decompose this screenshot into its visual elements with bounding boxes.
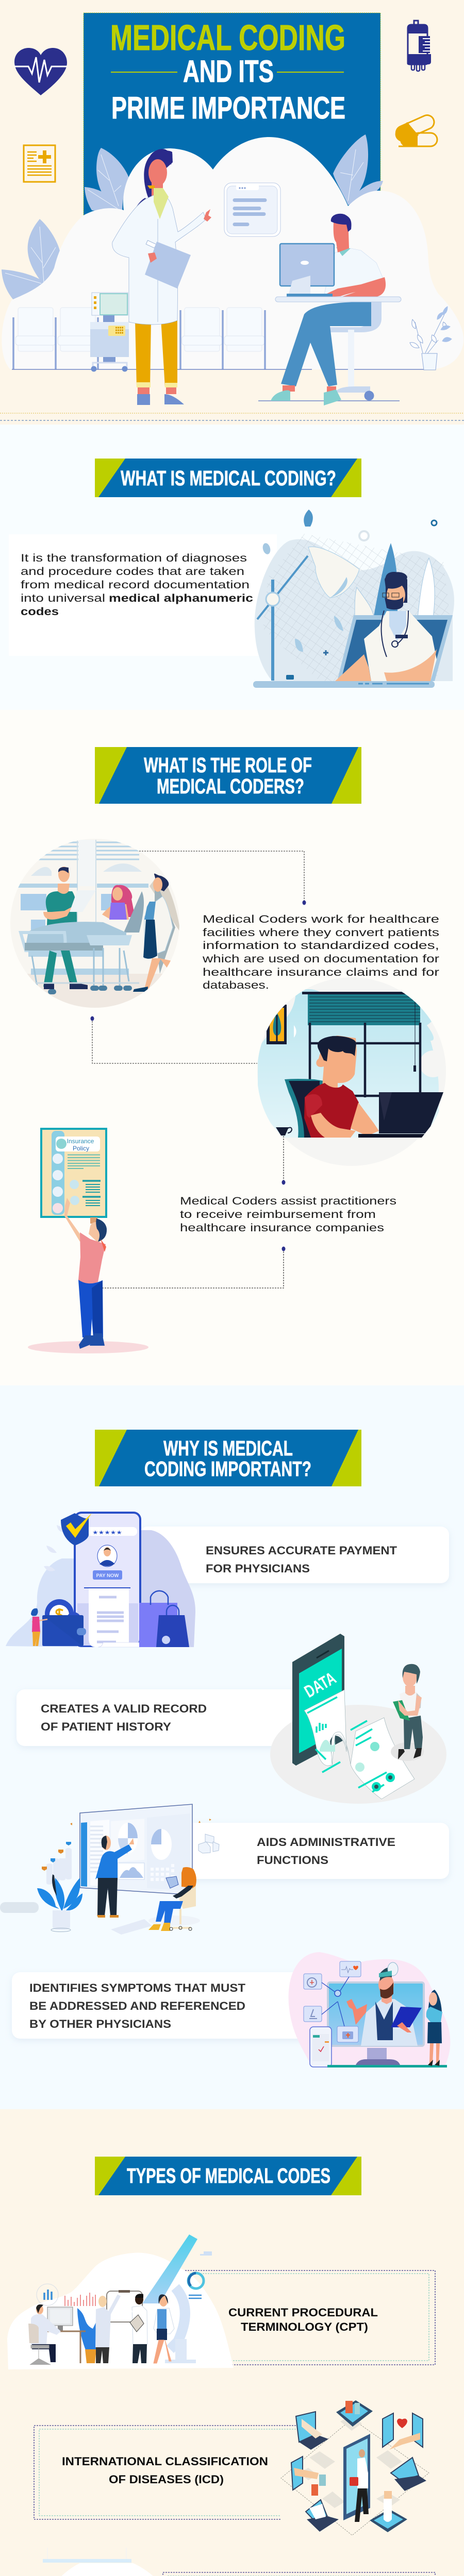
illustration: phone payment: ★★★★★: [92, 1530, 122, 1536]
text block: coders role: information to standardized codes,: [203, 940, 439, 952]
card: valid record: [16, 1689, 305, 1746]
card: administrative functions: FUNCTIONS: [257, 1854, 328, 1867]
background: role of medical coders section: [0, 710, 464, 1385]
card: valid record: CREATES A VALID RECORD: [41, 1702, 207, 1715]
box: CPT: CURRENT PROCEDURAL: [228, 2306, 378, 2319]
text block: coders role: Medical Coders work for healthcare: [203, 913, 439, 925]
connector: coder to text: [281, 1136, 286, 1185]
background: hero section: [0, 0, 464, 425]
card: identifies symptoms: IDENTIFIES SYMPTOMS THAT MUST: [29, 1981, 246, 1994]
text block: definition: into universal: [21, 592, 105, 604]
text block: definition: and procedure codes that are taken: [21, 566, 244, 578]
background: why important section: [0, 1385, 464, 2109]
section: role of medical coders: [10, 747, 446, 1353]
heading: why important: [95, 1430, 361, 1486]
doctor woman: [112, 149, 211, 405]
leaves behind cloud: [2, 134, 383, 300]
connector: ward down to coder: [91, 1016, 257, 1063]
box: CPT: TERMINOLOGY (CPT): [241, 2320, 368, 2333]
illustration: HCPC lab board: [0, 2548, 207, 2576]
card: identifies symptoms: BY OTHER PHYSICIANS: [29, 2018, 171, 2030]
text block: definition: medical alphanumeric: [109, 592, 253, 604]
section: types of medical codes: [0, 2157, 460, 2576]
text block: definition: [21, 552, 253, 618]
icon: heart with ECG: [14, 48, 67, 95]
decorative dotted separators: [0, 413, 464, 414]
heading: what is medical coding: [95, 459, 361, 497]
illustration: person holding insurance policy: Insurance: [67, 1138, 94, 1145]
text block: coders role: which are used on documentation for: [202, 953, 439, 965]
card: accurate payment: ENSURES ACCURATE PAYMENT: [206, 1544, 397, 1557]
background: what is medical coding section: [0, 425, 464, 710]
text block: coders role: facilities where they convert patients: [203, 927, 439, 939]
heading: role of medical coders: WHAT IS THE ROLE OF: [144, 753, 312, 777]
section: what is medical coding: [9, 459, 454, 688]
white text panel: [9, 534, 277, 656]
title divider lines: [111, 72, 344, 73]
text block: reimbursement: Medical Coders assist practitioners: [180, 1195, 396, 1207]
title: and its: AND ITS: [183, 54, 274, 89]
heading: why important: WHY IS MEDICAL: [163, 1436, 293, 1460]
background: types of codes section: [0, 2109, 464, 2576]
waiting chairs left: [13, 308, 98, 369]
card: accurate payment: FOR PHYSICIANS: [206, 1562, 310, 1575]
icon: pills: [394, 113, 437, 147]
box: ICD: [34, 2426, 296, 2519]
card: valid record: OF PATIENT HISTORY: [41, 1720, 171, 1733]
heading: types of medical codes: [95, 2157, 361, 2195]
floor line: [12, 369, 429, 401]
box: ICD: OF DISEASES (ICD): [109, 2473, 224, 2486]
title: prime importance: PRIME IMPORTANCE: [111, 91, 345, 125]
heading: role of medical coders: [95, 747, 361, 804]
potted plant: [410, 307, 452, 370]
heading: why important: CODING IMPORTANT?: [144, 1457, 311, 1481]
card: administrative functions: [170, 1823, 449, 1879]
cloud background: [2, 137, 463, 369]
man at desk: [271, 214, 401, 405]
illustration: doctor on laptop: [253, 510, 454, 688]
illustration: data record: [270, 1634, 446, 1804]
illustration: phone payment: PAY NOW: [96, 1573, 119, 1579]
illustration: coder at laptop circle: [257, 977, 446, 1166]
illustration: telemedicine doctor: [289, 1952, 450, 2067]
illustration: person holding insurance policy: Policy: [73, 1145, 89, 1152]
text block: definition: It is the transformation of diagnoses: [21, 552, 247, 564]
icon: medical document: [24, 145, 55, 182]
illustration: ICD digital health: [281, 2400, 429, 2535]
box: CPT: [175, 2270, 435, 2365]
text block: reimbursement: to receive reimbursement from: [180, 1209, 376, 1221]
card: identifies symptoms: [12, 1972, 311, 2039]
box: HCPC: [163, 2572, 435, 2576]
box: ICD: INTERNATIONAL CLASSIFICATION: [62, 2455, 268, 2468]
heading: what is medical coding: WHAT IS MEDICAL CODING?: [121, 466, 336, 490]
illustration: person holding insurance policy: [28, 1129, 148, 1353]
card: administrative functions: AIDS ADMINISTRATIVE: [257, 1836, 395, 1849]
heading: types of medical codes: TYPES OF MEDICAL CODES: [127, 2164, 330, 2188]
text block: reimbursement: healthcare insurance companies: [180, 1222, 384, 1234]
illustration: phone payment: [6, 1513, 195, 1647]
connector: ward to text: [139, 851, 306, 905]
text block: definition: codes: [21, 606, 59, 618]
connector: text to person: [103, 1247, 286, 1288]
waiting chairs right: [180, 308, 265, 369]
hero illustration and title: [0, 13, 464, 420]
section: why is medical coding important: [0, 1430, 450, 2067]
tablet card: [224, 183, 280, 236]
illustration: CPT lab team: [7, 2234, 234, 2369]
card: identifies symptoms: BE ADDRESSED AND REFERENCED: [29, 1999, 245, 2012]
text block: coders role: databases.: [203, 979, 269, 991]
text block: coders role: healthcare insurance claims and for: [203, 967, 439, 978]
text block: reimbursement: [180, 1195, 396, 1234]
illustration: dashboard team: [0, 1804, 219, 1935]
title: medical coding: MEDICAL CODING: [110, 18, 345, 58]
text block: definition: from medical record documentation: [21, 579, 250, 591]
text block: coders role: [202, 913, 439, 991]
illustration: data record: DATA: [301, 1668, 339, 1702]
illustration: hospital ward circle: [10, 839, 180, 1010]
title panel: [84, 13, 380, 219]
heading: role of medical coders: MEDICAL CODERS?: [157, 774, 304, 798]
medical monitor cart: [90, 293, 129, 372]
icon: IV bag: [407, 21, 431, 71]
card: accurate payment: [139, 1527, 449, 1583]
